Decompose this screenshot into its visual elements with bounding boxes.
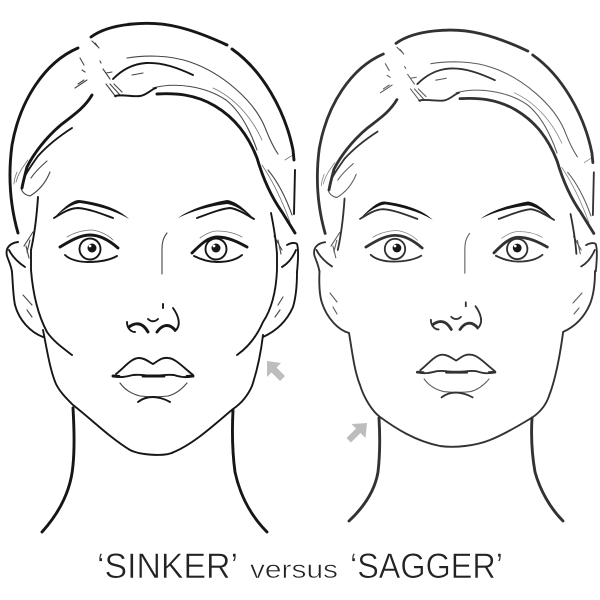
ears and cheek lines: left face: [12, 250, 297, 355]
hair and features, repeated at right: [314, 30, 597, 397]
hair parting: [75, 41, 122, 97]
caption: ‘SINKER’: [97, 547, 238, 586]
ears: right face: [319, 271, 595, 333]
face: sagger (right): [314, 30, 597, 521]
shared hair and features: [7, 23, 298, 402]
neck: left face: [42, 408, 267, 532]
hair strands: [14, 56, 295, 233]
temples and ear tops: [7, 197, 298, 272]
eyebrow: right: [178, 200, 255, 220]
lips: [113, 358, 193, 402]
caption: ‘SAGGER’: [350, 547, 503, 586]
face: sinker (left): [7, 23, 298, 532]
jawline: sagger: [349, 333, 563, 447]
eye: left: [60, 230, 118, 262]
arrow: sinker jowl: [267, 361, 285, 381]
nose: [127, 233, 179, 332]
caption: [97, 547, 503, 586]
eyebrow: left: [53, 200, 129, 219]
caption: versus: [250, 556, 338, 584]
neck: right face: [349, 418, 563, 521]
hair outline: [10, 23, 295, 233]
eye: right: [192, 231, 247, 262]
arrow: sagger jowl: [346, 423, 367, 442]
jawline: sinker: [43, 330, 263, 455]
